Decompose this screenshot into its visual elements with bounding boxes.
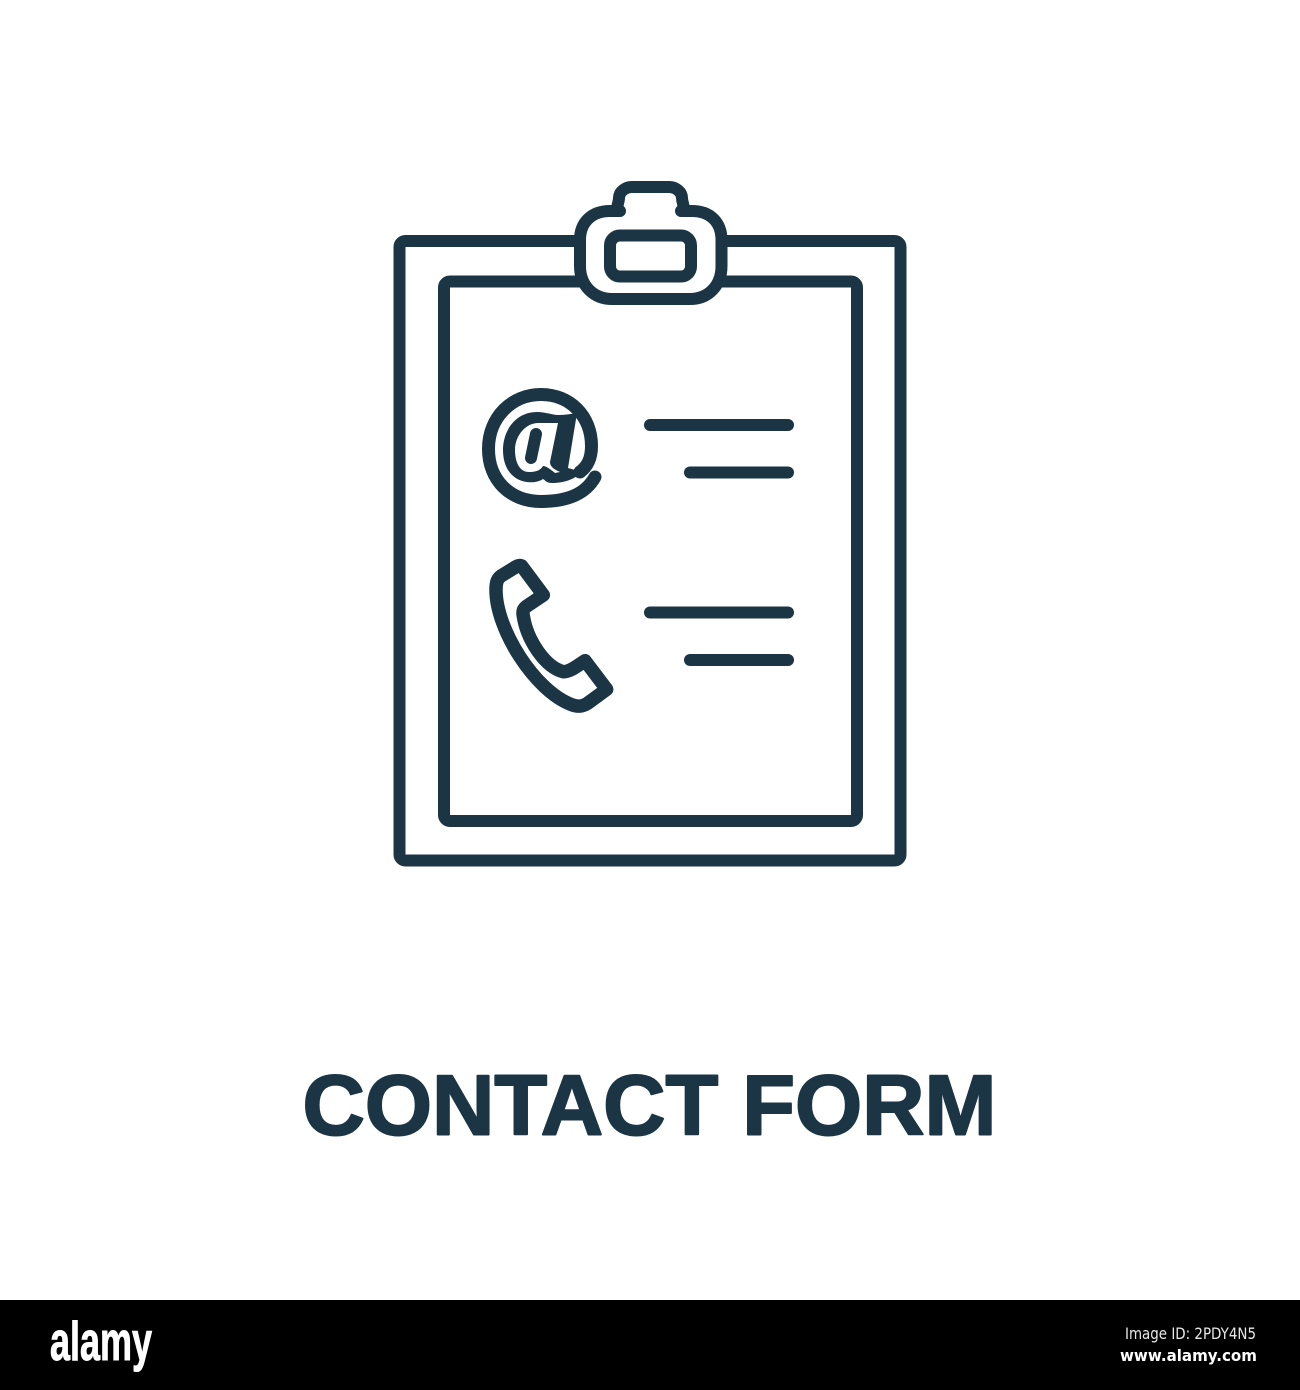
footer logo: alamy	[50, 1310, 152, 1372]
clip	[580, 187, 722, 299]
phone text lines	[650, 612, 788, 660]
image id: Image ID: 2PDY4N5	[1125, 1324, 1256, 1343]
icon: clipboard contact form	[400, 187, 900, 860]
website url: www.alamy.com	[1120, 1346, 1257, 1365]
email text lines	[650, 425, 788, 472]
paper sheet outline	[444, 282, 857, 821]
icon: telephone handset	[496, 566, 607, 706]
title: CONTACT FORM	[302, 1058, 997, 1154]
footer bar	[0, 1300, 1300, 1390]
clipboard board outline	[400, 241, 900, 860]
icon: at sign	[488, 394, 595, 502]
